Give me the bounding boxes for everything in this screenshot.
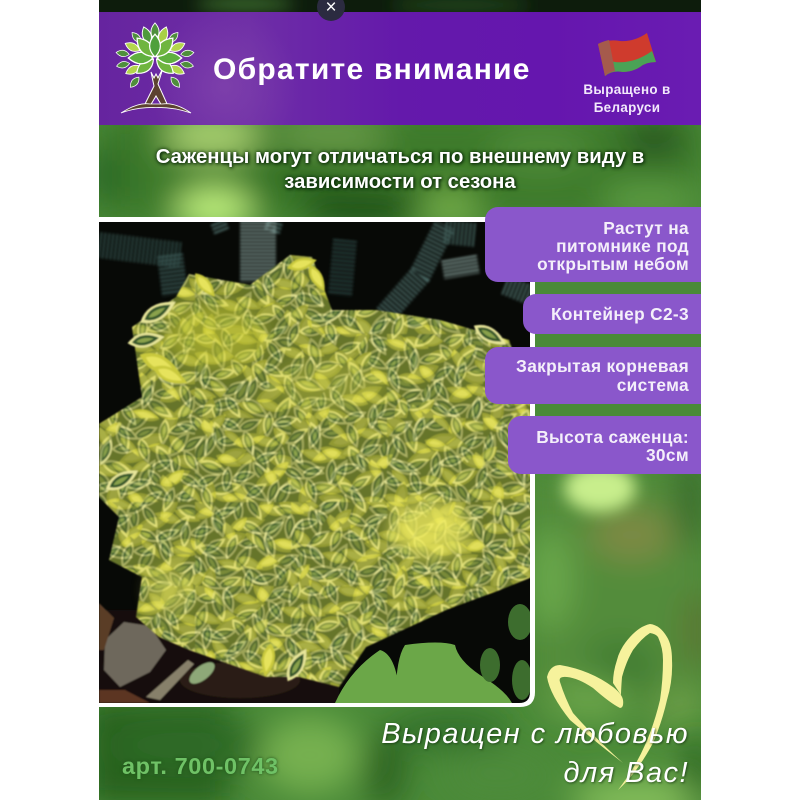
trunk and ground — [121, 68, 191, 113]
article number: арт. 700-0743 — [122, 753, 279, 779]
info tag: seedling height: 30см — [646, 445, 689, 465]
subtitle: зависимости от сезона — [284, 171, 516, 193]
photo: variegated euonymus shrub — [99, 217, 666, 780]
info tag: seedling height — [508, 416, 701, 474]
info tag: closed root system: Закрытая корневая — [516, 356, 689, 376]
background: blurred green foliage — [99, 0, 701, 800]
large green leaf — [335, 642, 512, 703]
close button — [317, 0, 345, 21]
shrub foliage — [99, 254, 532, 687]
info tag: container: Контейнер С2-3 — [551, 304, 689, 324]
info tag: grown outdoors — [485, 207, 701, 282]
info tag: seedling height: Высота саженца: — [536, 427, 689, 447]
slogan: Выращен с любовью — [381, 718, 689, 750]
info tag: closed root system — [485, 347, 701, 404]
header band — [99, 12, 701, 125]
info tag: closed root system: система — [617, 375, 689, 395]
icon: yellow heart — [547, 624, 672, 790]
subtitle: Саженцы могут отличаться по внешнему виду в — [156, 146, 644, 168]
text: grown in Belarus: Выращено в — [583, 82, 671, 97]
crown leaves — [116, 23, 194, 89]
logo: tree — [116, 22, 194, 114]
slogan — [381, 718, 689, 789]
text: grown in Belarus — [583, 82, 671, 115]
info tag: grown outdoors: открытым небом — [537, 254, 689, 274]
spruce branches — [99, 222, 530, 315]
title: Обратите внимание — [213, 53, 531, 86]
info tag: grown outdoors: Растут на — [603, 218, 689, 238]
subtitle — [154, 146, 646, 193]
mulch and stones — [99, 603, 339, 703]
text: grown in Belarus: Беларуси — [594, 100, 660, 115]
icon: Belarus flag — [598, 33, 656, 76]
small ground leaves — [480, 604, 532, 700]
info tag: container — [523, 294, 701, 334]
info tag: grown outdoors: питомнике под — [556, 236, 689, 256]
slogan: для Вас! — [563, 757, 689, 789]
